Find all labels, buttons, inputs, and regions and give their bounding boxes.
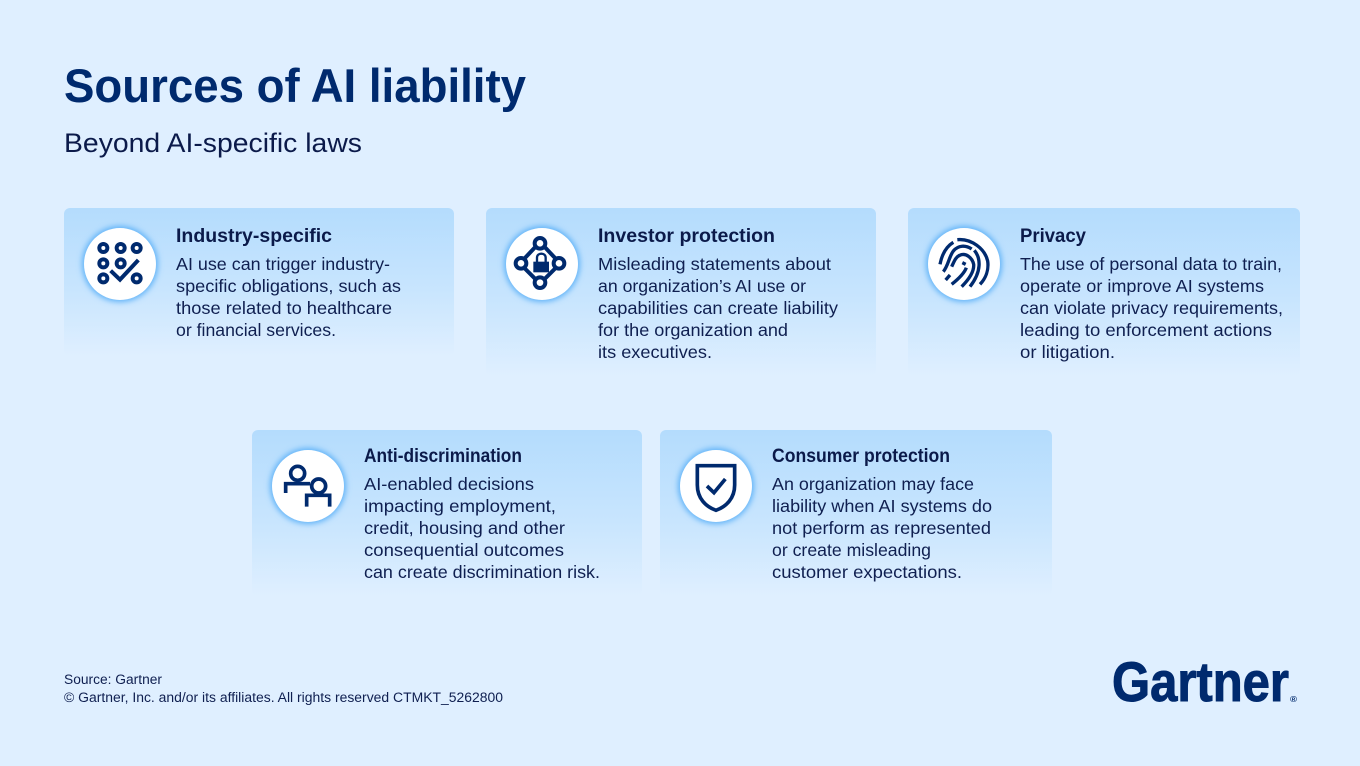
text block: consumer protection: liability when AI systems do — [772, 496, 992, 516]
logo: Gartner: Gartner — [1112, 650, 1289, 713]
text block: privacy — [1020, 254, 1283, 362]
source note: Source: Gartner — [64, 672, 163, 687]
text block: anti-discrimination: can create discrimination risk. — [364, 562, 600, 582]
text block: anti-discrimination: credit, housing and other — [364, 518, 565, 538]
panel: investor protection — [486, 208, 876, 376]
text block: investor protection — [598, 254, 838, 362]
heading: privacy: Privacy — [1020, 226, 1086, 247]
logo: Gartner: ® — [1290, 695, 1297, 704]
text block: industry-specific: AI use can trigger industry- — [176, 254, 390, 274]
panel: consumer protection — [660, 430, 1052, 596]
text block: investor protection: an organization’s AI use or — [598, 276, 806, 296]
heading: industry-specific: Industry-specific — [176, 226, 332, 247]
heading: anti-discrimination: Anti-discrimination — [364, 446, 522, 467]
text block: privacy: or litigation. — [1020, 342, 1115, 362]
text block: anti-discrimination: consequential outcomes — [364, 540, 564, 560]
text block: privacy: can violate privacy requirements, — [1020, 298, 1283, 318]
icon: two people — [270, 448, 346, 524]
text block: consumer protection: not perform as represented — [772, 518, 991, 538]
subtitle: Beyond AI-specific laws — [64, 128, 362, 158]
panel: industry-specific — [64, 208, 454, 356]
icon: fingerprint — [926, 226, 1002, 302]
text block: industry-specific: or financial services. — [176, 320, 336, 340]
text block: consumer protection: or create misleading — [772, 540, 931, 560]
text block: investor protection: Misleading statements about — [598, 254, 831, 274]
text block: consumer protection: An organization may face — [772, 474, 974, 494]
text block: privacy: operate or improve AI systems — [1020, 276, 1264, 296]
panel: anti-discrimination — [252, 430, 642, 596]
text block: investor protection: capabilities can create liability — [598, 298, 838, 318]
text block: investor protection: for the organization and — [598, 320, 788, 340]
text block: industry-specific: specific obligations, such as — [176, 276, 401, 296]
heading: investor protection: Investor protection — [598, 226, 775, 247]
text block: industry-specific: those related to healthcare — [176, 298, 392, 318]
text block: anti-discrimination — [364, 474, 600, 582]
title: Sources of AI liability — [64, 59, 526, 112]
text block: industry-specific — [176, 254, 401, 340]
panel: privacy — [908, 208, 1300, 376]
text block: anti-discrimination: AI-enabled decisions — [364, 474, 534, 494]
text block: investor protection: its executives. — [598, 342, 712, 362]
heading: consumer protection: Consumer protection — [772, 446, 950, 467]
text block: anti-discrimination: impacting employment, — [364, 496, 556, 516]
source note — [64, 672, 503, 705]
icon: grid with check — [82, 226, 158, 302]
text block: privacy: The use of personal data to train, — [1020, 254, 1282, 274]
text block: privacy: leading to enforcement actions — [1020, 320, 1272, 340]
source note: © Gartner, Inc. and/or its affiliates. All rights reserved CTMKT_5262800 — [64, 690, 503, 705]
icon: shield with check — [678, 448, 754, 524]
text block: consumer protection — [772, 474, 992, 582]
icon: network with lock — [504, 226, 580, 302]
text block: consumer protection: customer expectations. — [772, 562, 962, 582]
